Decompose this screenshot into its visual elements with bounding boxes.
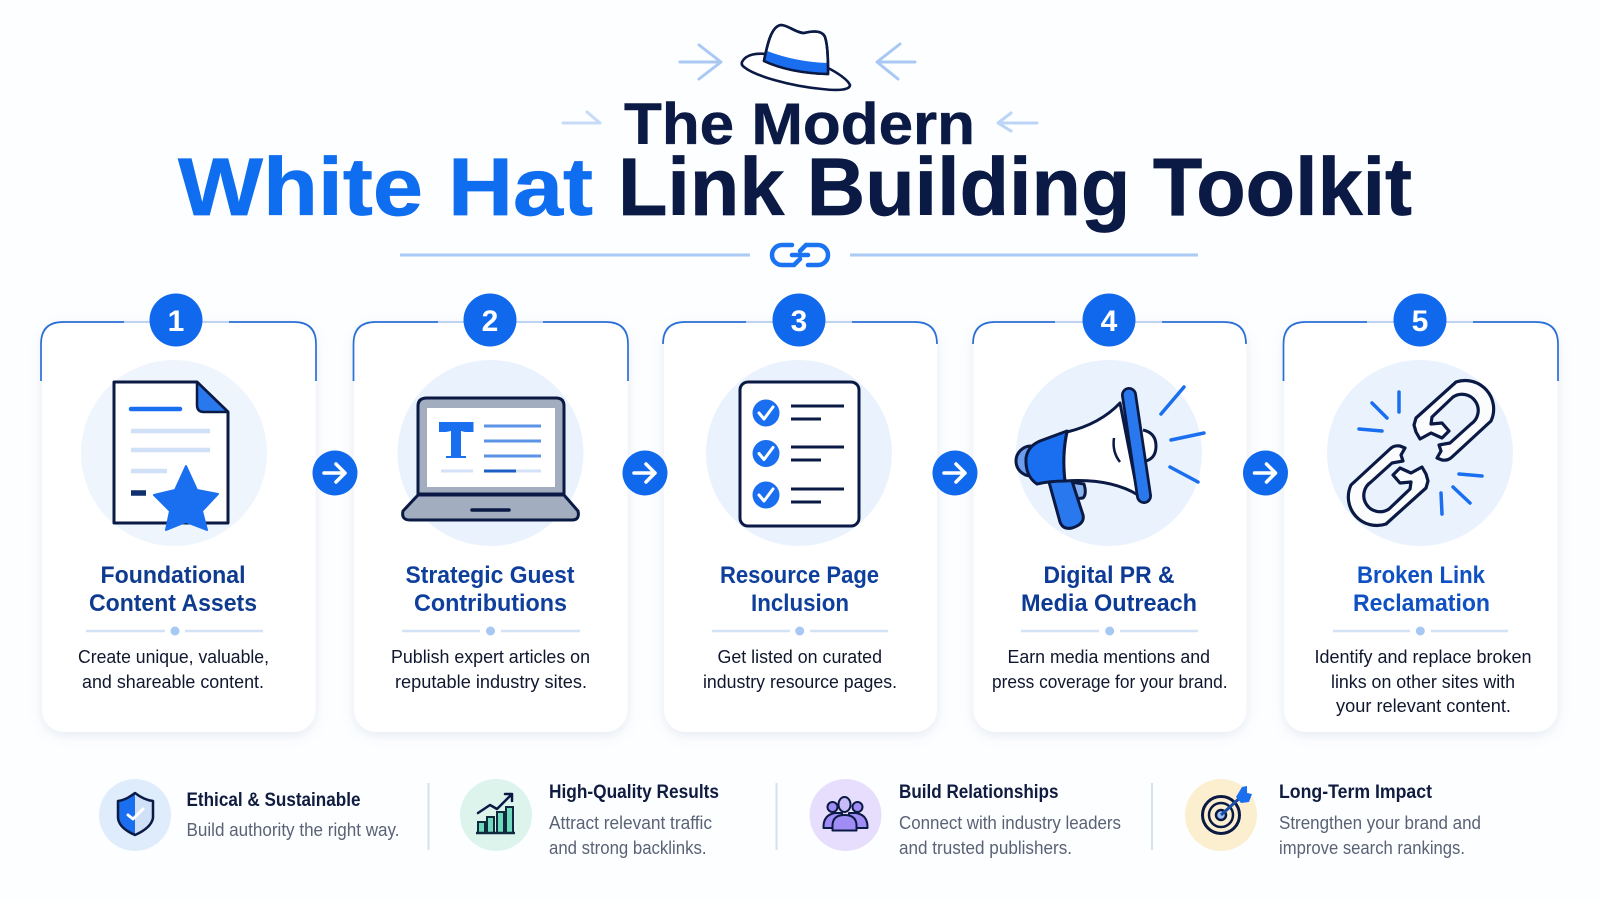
arrow: right of title [998, 113, 1037, 131]
card description: your relevant content. [1336, 695, 1511, 716]
card heading: Resource Page [720, 562, 879, 589]
icon backdrop [1327, 360, 1513, 546]
card heading: Broken Link [1357, 562, 1486, 589]
icon: target with dart [1202, 786, 1252, 834]
card divider [402, 626, 580, 636]
card description [78, 646, 269, 692]
benefit text: and strong backlinks. [549, 838, 706, 858]
icon: megaphone [1016, 387, 1204, 528]
card heading: Media Outreach [1021, 590, 1197, 617]
benefit text [549, 813, 712, 858]
card divider [1021, 626, 1198, 636]
card heading [1021, 562, 1197, 617]
card heading [406, 562, 575, 617]
panel: Resource Page Inclusion [663, 294, 937, 732]
benefit heading: High-Quality Results [549, 782, 719, 803]
card description [992, 646, 1228, 692]
panel: Broken Link Reclamation [1284, 294, 1558, 732]
title [178, 92, 1412, 233]
icon: growth chart [476, 794, 515, 833]
panel: Strategic Guest Contributions [354, 294, 628, 732]
card description: press coverage for your brand. [992, 671, 1228, 692]
card heading: Reclamation [1353, 590, 1490, 617]
icon backdrop [1016, 360, 1202, 546]
title line 1: The Modern [624, 92, 975, 157]
benefit heading: Long-Term Impact [1279, 782, 1433, 803]
benefit text [899, 813, 1121, 858]
benefit heading: Ethical & Sustainable [186, 790, 360, 811]
card heading: Content Assets [89, 590, 257, 617]
step number badge: 5 [1412, 305, 1428, 338]
icon: laptop [403, 398, 578, 520]
arrow: left of title [563, 112, 600, 123]
benefit: Ethical & Sustainable [99, 779, 400, 851]
icon: shield [118, 793, 153, 835]
arrow: right of hat [877, 44, 915, 79]
icon: chain link [772, 245, 828, 265]
card heading: Contributions [414, 590, 567, 617]
icon backdrop [810, 779, 882, 851]
benefit text: Attract relevant traffic [549, 813, 712, 833]
card description: Create unique, valuable, [78, 646, 269, 667]
benefit text: Build authority the right way. [186, 820, 400, 840]
card heading [89, 562, 257, 617]
card heading [720, 562, 879, 617]
card heading: Foundational [100, 562, 246, 589]
benefit: High-Quality Results [460, 779, 719, 858]
step number badge [772, 294, 826, 346]
icon backdrop [398, 360, 584, 546]
card description: Get listed on curated [718, 646, 882, 667]
title line 2 accent: White Hat [178, 142, 593, 233]
card description: Identify and replace broken [1314, 646, 1532, 667]
panel: Digital PR & Media Outreach [973, 294, 1246, 732]
card top border [41, 322, 316, 381]
icon backdrop [460, 779, 532, 851]
icon: checklist [740, 382, 859, 526]
icon backdrop [99, 779, 171, 851]
icon: white hat [742, 25, 850, 90]
arrow: step 3 to 4 [932, 450, 978, 496]
card top border [354, 322, 628, 381]
card background [42, 322, 316, 732]
benefit: Build Relationships [810, 779, 1121, 858]
card divider [1333, 626, 1508, 636]
card top border [663, 322, 937, 344]
benefit text [1279, 813, 1481, 858]
card heading: Digital PR & [1044, 562, 1174, 589]
card description [391, 646, 590, 692]
card background [664, 322, 937, 732]
card description: Earn media mentions and [1008, 646, 1210, 667]
card top border [973, 322, 1246, 344]
step number badge: 2 [482, 305, 498, 338]
title divider with chain icon [400, 245, 1198, 265]
card heading [1353, 562, 1490, 617]
icon: broken chain [1348, 380, 1494, 526]
arrow: step 1 to 2 [312, 450, 358, 496]
card description: reputable industry sites. [395, 671, 587, 692]
step number badge [1394, 294, 1446, 346]
benefit text: improve search rankings. [1279, 838, 1465, 858]
icon: people [823, 797, 868, 830]
step number badge: 3 [791, 305, 807, 338]
benefit text: Strengthen your brand and [1279, 813, 1481, 833]
benefit text: Connect with industry leaders [899, 813, 1121, 833]
panel: Foundational Content Assets [41, 294, 316, 732]
step number badge [1082, 294, 1136, 346]
card description: Publish expert articles on [391, 646, 590, 667]
icon: document with star [114, 382, 228, 530]
benefit heading: Build Relationships [899, 782, 1058, 803]
card heading: Inclusion [751, 590, 849, 617]
step number badge: 1 [168, 305, 184, 338]
card description: industry resource pages. [703, 671, 897, 692]
card description [703, 646, 897, 692]
title line 2: Link Building Toolkit [618, 142, 1412, 233]
benefit text: and trusted publishers. [899, 838, 1072, 858]
card background [354, 322, 628, 732]
arrow: step 4 to 5 [1243, 450, 1288, 496]
card divider [712, 626, 888, 636]
card heading: Strategic Guest [406, 562, 575, 589]
card description: and shareable content. [82, 671, 264, 692]
card background [974, 322, 1246, 732]
step number badge [150, 294, 202, 346]
step number badge: 4 [1101, 305, 1118, 338]
icon backdrop [81, 360, 267, 546]
card description [1314, 646, 1532, 716]
arrow: step 2 to 3 [622, 450, 668, 496]
step number badge [464, 294, 516, 346]
icon backdrop [706, 360, 892, 546]
benefit: Long-Term Impact [1185, 779, 1481, 858]
card divider [86, 626, 263, 636]
card description: links on other sites with [1331, 671, 1515, 692]
arrow: left of hat [680, 45, 721, 79]
icon backdrop [1185, 779, 1257, 851]
card background [1284, 322, 1558, 732]
card top border [1284, 322, 1558, 381]
header: hat and arrows [563, 25, 1037, 131]
